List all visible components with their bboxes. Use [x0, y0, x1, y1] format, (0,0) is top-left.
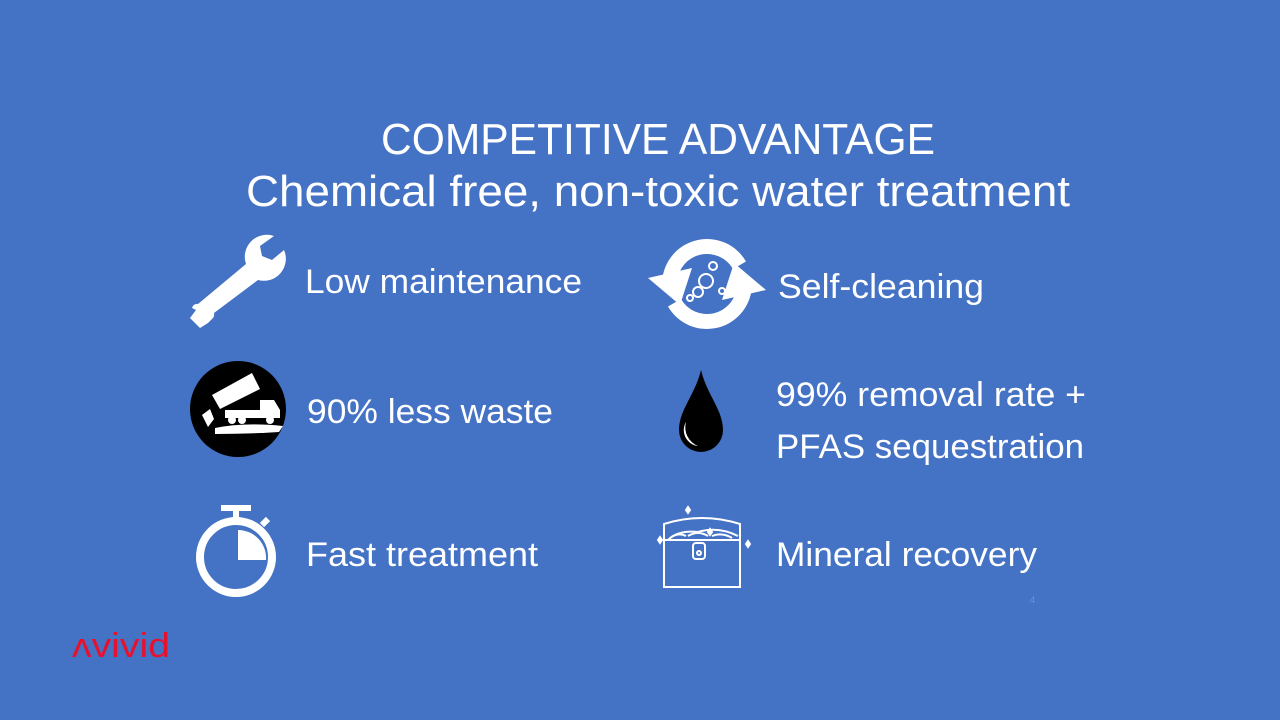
text: removal rate [776, 376, 1086, 466]
icon: dump truck [190, 361, 286, 457]
icon: treasure chest [658, 507, 750, 587]
title [246, 115, 1070, 216]
title: Chemical free, non-toxic water treatment [246, 167, 1070, 216]
text: self-cleaning: Self-cleaning [778, 268, 984, 306]
text: low maintenance: Low maintenance [305, 263, 582, 301]
title: COMPETITIVE ADVANTAGE [381, 115, 935, 164]
icon: stopwatch [200, 505, 272, 593]
text: fast treatment: Fast treatment [306, 536, 539, 574]
logo: avivid: ʌvivid [72, 627, 170, 665]
icon: self-cleaning arrows [648, 239, 766, 329]
text: mineral recovery: Mineral recovery [776, 536, 1037, 574]
page number: 4 [1030, 595, 1035, 605]
icon: drop [679, 370, 723, 452]
text: less waste: 90% less waste [307, 393, 553, 431]
text: removal rate: PFAS sequestration [776, 428, 1084, 466]
text: removal rate: 99% removal rate + [776, 376, 1086, 414]
icon: wrench [190, 235, 286, 328]
